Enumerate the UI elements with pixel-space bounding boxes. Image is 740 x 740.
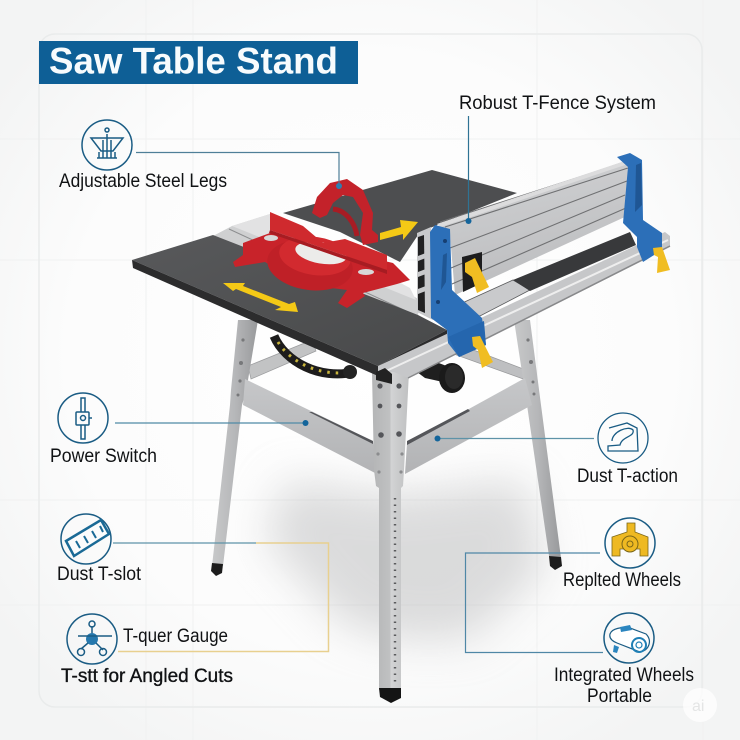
label: Replted Wheels xyxy=(563,570,681,591)
yellow connector xyxy=(118,543,328,652)
leader line xyxy=(136,152,342,189)
red miter gauge xyxy=(233,179,410,308)
callout: integrated wheels xyxy=(554,613,694,707)
sliding extension bar xyxy=(460,232,636,316)
label: T-stt for Angled Cuts xyxy=(61,666,233,687)
icon: ruler xyxy=(61,514,111,564)
ai watermark xyxy=(683,688,717,722)
t-fence aluminium xyxy=(437,160,628,295)
label: Power Switch xyxy=(50,446,157,467)
side rail xyxy=(376,232,670,384)
title banner: Saw Table Stand xyxy=(49,40,338,82)
right leg xyxy=(514,320,562,570)
leader line xyxy=(434,436,594,442)
t-fence end stack xyxy=(417,227,433,320)
label: T-quer Gauge xyxy=(123,626,228,647)
label: Integrated Wheels xyxy=(554,665,694,686)
icon: dust port xyxy=(598,413,648,463)
label: Portable xyxy=(587,686,652,707)
label: Robust T-Fence System xyxy=(459,93,656,114)
front braces xyxy=(243,378,532,474)
floor shadow xyxy=(265,480,545,640)
centre leg xyxy=(372,372,409,703)
fence arrow xyxy=(380,220,418,240)
aluminium slot strip xyxy=(213,214,420,316)
back table plate xyxy=(283,170,517,262)
callout: replted wheels xyxy=(563,518,681,591)
lower clamp handle xyxy=(472,336,493,368)
ai watermark: ai xyxy=(692,698,704,715)
leader line xyxy=(113,542,256,544)
leader line xyxy=(466,116,472,224)
icon: gauge xyxy=(67,614,117,664)
stand illustration xyxy=(132,153,670,703)
right blue bracket xyxy=(617,153,662,262)
callout: taper gauge xyxy=(61,614,233,687)
callout: power switch xyxy=(50,393,308,467)
callout: adjustable steel legs xyxy=(59,120,342,192)
fence clamp handle xyxy=(462,252,489,293)
right clamp handle xyxy=(653,247,670,273)
front table top xyxy=(132,235,447,376)
callout: dust t-action xyxy=(434,413,678,487)
icon: wheel xyxy=(604,613,654,663)
icon: switch xyxy=(58,393,108,443)
locking knob xyxy=(417,362,465,393)
back brace and gear arc xyxy=(248,336,526,380)
left leg xyxy=(211,320,258,576)
icon: yellow caster xyxy=(605,518,655,568)
left blue bracket xyxy=(430,225,486,357)
label: Adjustable Steel Legs xyxy=(59,171,227,192)
callout: robust t-fence xyxy=(459,93,656,224)
callout: dust t-slot xyxy=(57,514,256,585)
leader line xyxy=(115,420,308,426)
blue connector xyxy=(466,553,603,652)
label: Dust T-action xyxy=(577,466,678,487)
icon: steel legs xyxy=(82,120,132,170)
double arrow xyxy=(223,283,298,312)
label: Dust T-slot xyxy=(57,564,142,585)
